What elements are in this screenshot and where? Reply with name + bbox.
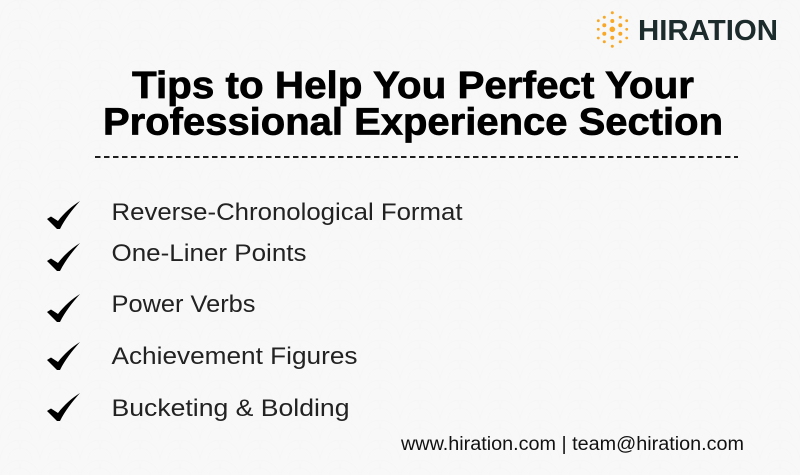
item: One-Liner Points: One-Liner Points	[112, 240, 306, 267]
item: Reverse-Chronological Format: Reverse-Chronological Format	[112, 199, 463, 226]
item: Achievement Figures: Achievement Figures	[112, 343, 358, 370]
dashed divider	[95, 156, 738, 158]
item: Bucketing & Bolding: Bucketing & Bolding	[112, 395, 350, 422]
checklist	[47, 199, 463, 422]
icon: check mark	[47, 294, 80, 322]
item: Power Verbs: Power Verbs	[112, 291, 256, 318]
title: Tips to Help You Perfect Your	[132, 65, 694, 107]
icon: check mark	[47, 243, 80, 271]
logo wordmark: HIRATION	[638, 15, 778, 47]
icon: orange radial dots	[597, 11, 628, 48]
icon: check mark	[47, 342, 80, 370]
item: One-Liner Points	[47, 240, 306, 271]
logo: Hiration	[597, 11, 778, 48]
title: Professional Experience Section	[103, 102, 723, 144]
item: Power Verbs	[47, 291, 256, 322]
icon: check mark	[47, 393, 80, 421]
footer contact: www.hiration.com | team@hiration.com	[400, 434, 744, 455]
item: Bucketing & Bolding	[47, 393, 350, 422]
title	[103, 65, 723, 144]
icon: check mark	[47, 201, 80, 229]
